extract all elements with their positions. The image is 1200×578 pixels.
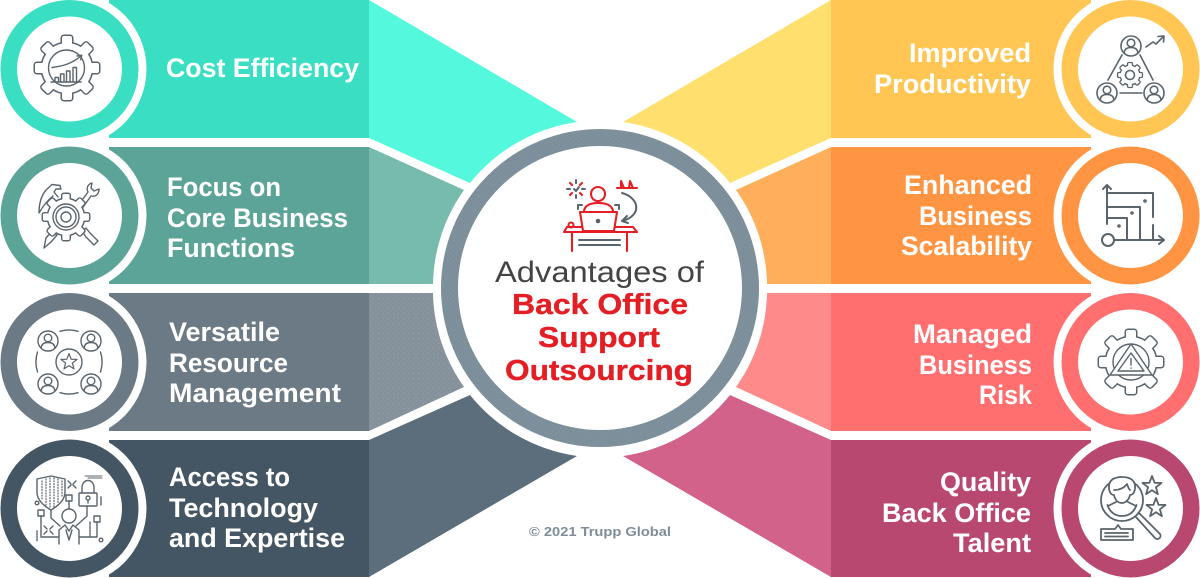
label [913,319,1032,410]
band [831,440,1091,577]
facet [369,293,464,431]
facet [369,395,577,577]
label: Functions [167,233,295,263]
copyright: © 2021 Trupp Global [529,524,671,539]
band [109,147,369,284]
label: and Expertise [169,523,345,553]
band [109,440,369,577]
band [109,293,369,431]
band [831,147,1091,284]
heading: Advantages of [495,256,705,289]
panel: Cost Efficiency [0,0,577,183]
label: Back Office [882,498,1031,528]
panel: Focus on Core Business Functions [0,138,464,292]
facet [623,0,831,183]
facet [736,147,831,284]
label: Productivity [874,69,1031,99]
badge ring [1054,285,1200,439]
heading: Outsourcing [505,355,693,387]
label: Technology [169,493,318,523]
panel: Access to Technology and Expertise [0,395,577,578]
band [831,293,1091,431]
label: Focus on [167,172,281,202]
badge ring [0,285,146,439]
badge ring [0,0,146,146]
label: Improved [909,38,1031,68]
panel: Improved Productivity [623,0,1200,183]
icon: gear with bar chart [35,36,99,100]
icon: talent search [1101,476,1166,540]
label: Risk [979,380,1032,410]
panel: central hub [433,121,767,455]
heading: Support [538,322,660,354]
icon: gear with warning [1099,330,1163,394]
label: Scalability [901,231,1032,261]
badge ring [1054,0,1200,146]
label: Versatile [169,317,280,347]
icon: scaling squares chart [1102,185,1164,246]
label [167,172,348,263]
band [109,0,369,138]
facet [369,0,577,183]
badge ring [1054,432,1200,578]
panel: Versatile Resource Management [0,285,464,439]
facet [736,293,831,431]
label: Talent [953,528,1031,558]
badge ring [0,432,146,578]
icon: team with gear [1097,36,1164,103]
label: Business [919,201,1032,231]
panel: Enhanced Business Scalability [736,138,1200,292]
facet [369,147,464,284]
label [169,462,345,553]
icon: technology expert [35,476,103,544]
label: Access to [169,462,290,492]
label: Cost Efficiency [166,53,359,83]
icon: gear with tools [39,183,99,248]
facet [623,395,831,577]
badge ring [0,138,146,292]
icon: person at laptop desk [564,180,637,251]
band [831,0,1091,138]
label [169,317,341,408]
panel: Quality Back Office Talent [623,395,1200,578]
hub ring [433,121,767,455]
label: Quality [940,467,1031,497]
label: Enhanced [904,170,1032,200]
label: Management [169,378,341,408]
label [901,170,1032,261]
label: Business [919,350,1032,380]
label: Resource [169,348,288,378]
badge ring [1054,138,1200,292]
label [874,38,1031,99]
panel: Managed Business Risk [736,285,1200,439]
label: Managed [913,319,1032,349]
icon: team around star [36,330,102,394]
label: Core Business [167,203,348,233]
heading: Back Office [512,289,688,321]
label [882,467,1031,558]
heading [495,256,705,387]
